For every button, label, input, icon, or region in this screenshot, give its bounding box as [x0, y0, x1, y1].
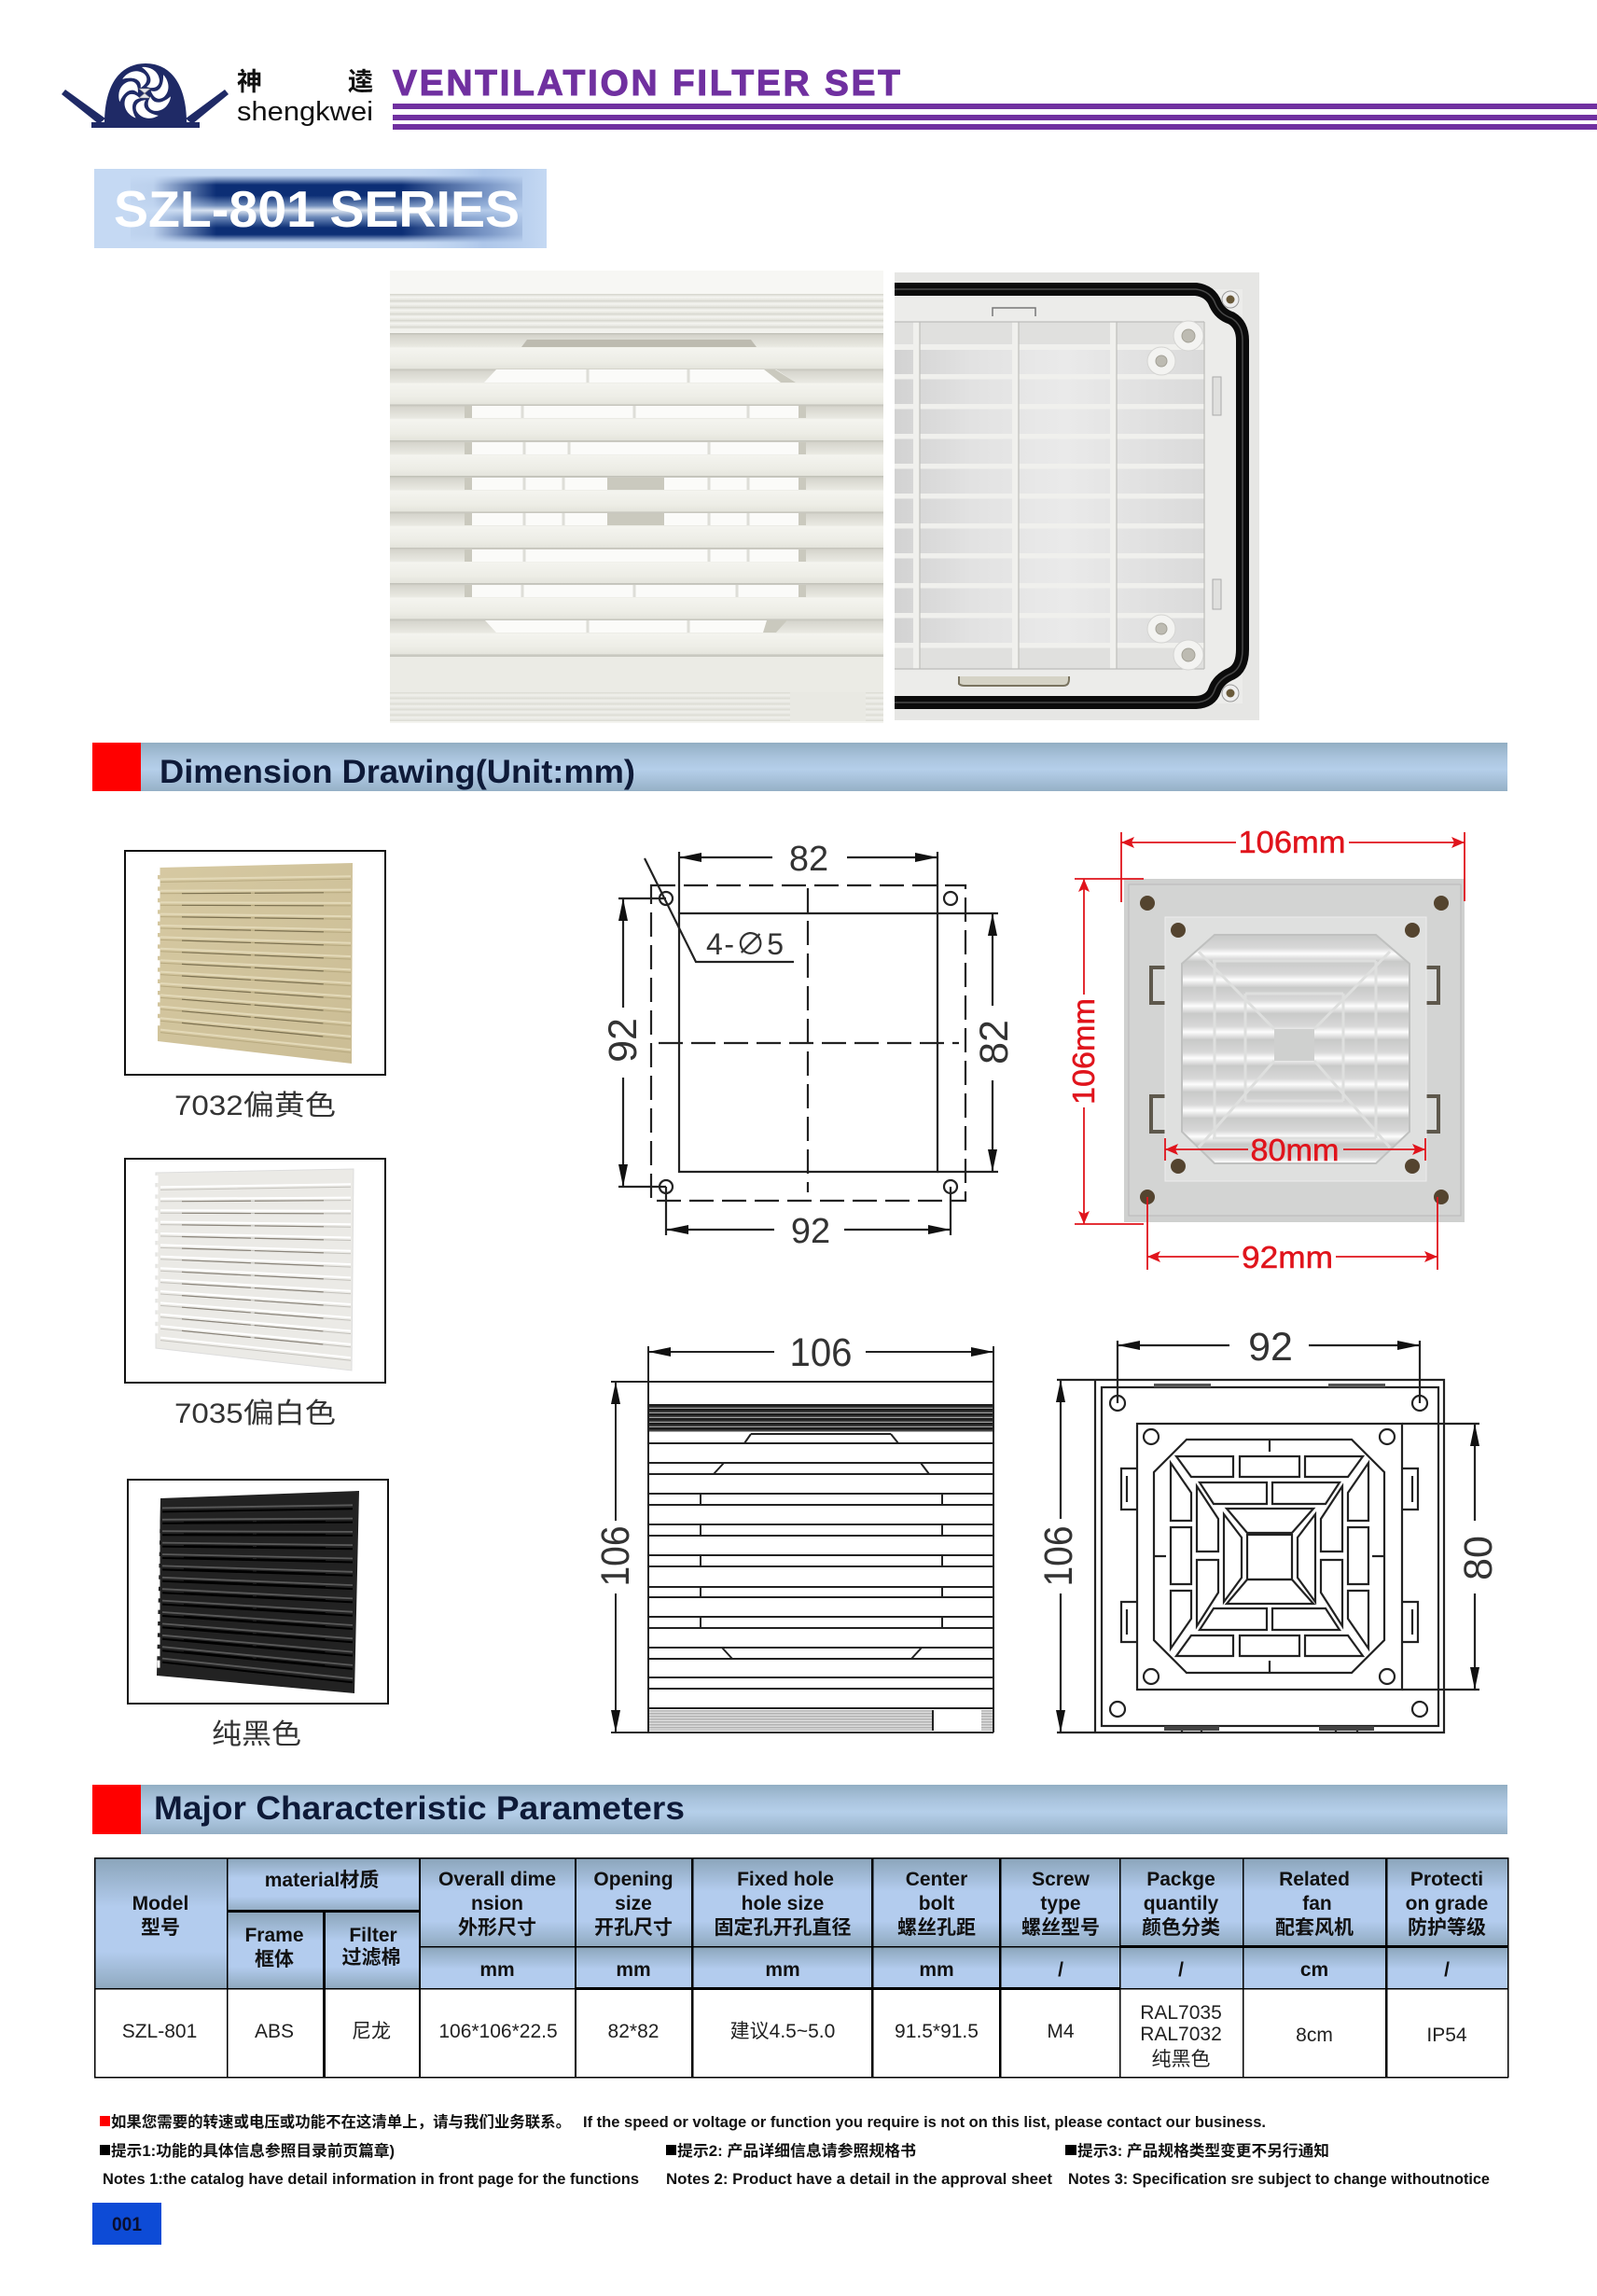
photo: filter rear with red dimensions: 106mm: [1066, 998, 1101, 1105]
dimension labels: [1036, 1325, 1501, 1586]
table data row: 纯黑色: [1151, 2049, 1211, 2070]
drawing: filter rear view: [1036, 1325, 1501, 1733]
table header text: Overall dime: [438, 1869, 556, 1890]
section bar: dimension drawing: Dimension Drawing(Unit:mm): [160, 754, 635, 790]
logo: shengkwei: [62, 63, 373, 128]
table header text: mm: [765, 1959, 800, 1981]
table data row: 建议4.5~5.0: [730, 2021, 835, 2042]
table header text: 配套风机: [1275, 1917, 1354, 1939]
logo: shengkwei: shengkwei: [237, 97, 373, 127]
table header text: type: [1040, 1893, 1081, 1914]
table data row: 尼龙: [352, 2021, 391, 2042]
table header text: [132, 1869, 1488, 1981]
drawing: mounting cut-out: [601, 840, 1017, 1251]
table header text: size: [615, 1893, 652, 1914]
notes: Notes 3: Specification sre subject to change withoutnotice: [1068, 2171, 1490, 2188]
table data row: 8cm: [1296, 2025, 1333, 2046]
table data row: SZL-801: [122, 2021, 197, 2042]
notes: If the speed or voltage or function you require is not on this list, please contact our business.: [583, 2114, 1266, 2131]
photo: louvered front of filter: [390, 271, 883, 723]
table header text: material材质: [265, 1870, 379, 1891]
table data row: 106*106*22.5: [438, 2021, 558, 2042]
dimension labels: 82: [789, 840, 828, 879]
section bar: dimension drawing: [92, 743, 1507, 791]
table header text: 固定孔开孔直径: [715, 1916, 851, 1939]
series badge: [94, 169, 547, 248]
dimension labels: [593, 1330, 853, 1586]
table data row: 82*82: [608, 2021, 659, 2042]
photo: rear of filter with gasket: [895, 272, 1259, 720]
page number: 001: [112, 2214, 142, 2235]
table header text: Filter: [349, 1925, 397, 1946]
table header text: bolt: [919, 1893, 954, 1914]
logo: shengkwei: 神: [237, 68, 262, 96]
table header text: 外形尺寸: [458, 1917, 536, 1939]
colour swatch: 7035 white: [125, 1159, 385, 1429]
table header text: Packge: [1146, 1869, 1215, 1890]
table header text: 螺丝型号: [1021, 1917, 1100, 1939]
dimension labels: 92: [601, 1018, 646, 1063]
dimension labels: 106: [789, 1330, 853, 1375]
table data row: M4: [1047, 2021, 1075, 2042]
table header text: mm: [616, 1959, 651, 1981]
photo: filter rear with red dimensions: 80mm: [1250, 1133, 1340, 1167]
table header text: mm: [919, 1959, 954, 1981]
notes: 如果您需要的转速或电压或功能不在这清单上，请与我们业务联系。: [111, 2112, 571, 2131]
table header text: Model: [132, 1893, 188, 1914]
table data row: IP54: [1426, 2025, 1467, 2046]
colour swatch: 7035 white: 7035偏白色: [174, 1398, 336, 1429]
dimension labels: [601, 840, 1017, 1251]
notes: Notes 1:the catalog have detail information in front page for the functions: [103, 2171, 639, 2188]
table data row: [122, 2002, 1467, 2070]
table header text: Protecti: [1410, 1869, 1483, 1890]
table header text: quantily: [1144, 1893, 1219, 1914]
dimension labels: 80: [1456, 1536, 1501, 1580]
series badge: SZL-801 SERIES: [114, 180, 520, 238]
table header text: /: [1178, 1959, 1184, 1981]
dimension labels: 92: [791, 1212, 830, 1251]
colour swatch: black: 纯黑色: [212, 1719, 301, 1750]
colour swatch: 7032 beige: [125, 851, 385, 1121]
photo: filter rear with red dimensions: 92mm: [1242, 1240, 1333, 1274]
table header text: cm: [1300, 1959, 1328, 1981]
table header text: nsion: [471, 1893, 523, 1914]
section bar: major characteristic parameters: Major Characteristic Parameters: [154, 1790, 685, 1827]
title: ventilation filter set: VENTILATION FILTER SET: [393, 63, 900, 104]
title: ventilation filter set: [393, 63, 1597, 130]
table header text: Opening: [593, 1869, 674, 1890]
table header text: Fixed hole: [737, 1869, 834, 1890]
dimension labels: 4-∅5: [706, 927, 784, 961]
table header text: 螺丝孔距: [897, 1917, 976, 1939]
section bar: major characteristic parameters: [92, 1785, 1507, 1834]
table header text: fan: [1302, 1893, 1332, 1914]
notes: 提示1:功能的具体信息参照目录前页篇章): [111, 2141, 395, 2160]
notes: Notes 2: Product have a detail in the approval sheet: [666, 2171, 1053, 2188]
dimension labels: 106: [593, 1526, 638, 1586]
table header text: 型号: [141, 1917, 180, 1939]
table: parameters: [94, 1858, 1509, 2079]
notes: 提示3: 产品规格类型变更不另行通知: [1077, 2141, 1329, 2160]
table header text: Center: [906, 1869, 967, 1890]
notes: 提示2: 产品详细信息请参照规格书: [677, 2141, 916, 2160]
table header text: Frame: [244, 1925, 304, 1946]
table header text: Related: [1279, 1869, 1350, 1890]
table header text: 过滤棉: [341, 1947, 401, 1969]
table data row: ABS: [255, 2021, 294, 2042]
table header text: 防护等级: [1408, 1917, 1486, 1939]
notes: [100, 2112, 1490, 2188]
dimension labels: 92: [1248, 1325, 1293, 1370]
table header text: Screw: [1032, 1869, 1090, 1890]
photo: filter rear with red dimensions: 106mm: [1239, 825, 1345, 859]
table data row: RAL7035: [1140, 2002, 1222, 2024]
table header text: 开孔尺寸: [594, 1917, 673, 1939]
table header text: hole size: [742, 1893, 824, 1914]
photo: filter rear with red dimensions: [1066, 825, 1465, 1274]
colour swatch: 7032 beige: 7032偏黄色: [174, 1091, 336, 1121]
table header text: on grade: [1406, 1893, 1488, 1914]
table header text: /: [1058, 1959, 1063, 1981]
red dimensions: [1075, 832, 1465, 1270]
dimension labels: 82: [972, 1020, 1017, 1065]
table header text: 颜色分类: [1142, 1917, 1220, 1939]
logo: shengkwei: 逵: [348, 68, 373, 96]
table header text: /: [1444, 1959, 1450, 1981]
table header text: mm: [479, 1959, 515, 1981]
table data row: RAL7032: [1140, 2024, 1222, 2045]
dimension labels: 106: [1036, 1526, 1081, 1586]
page number: [92, 2203, 161, 2245]
table data row: 91.5*91.5: [895, 2021, 979, 2042]
colour swatch: black: [128, 1480, 388, 1750]
table header text: 框体: [255, 1949, 294, 1970]
drawing: louvre front view: [593, 1330, 993, 1732]
